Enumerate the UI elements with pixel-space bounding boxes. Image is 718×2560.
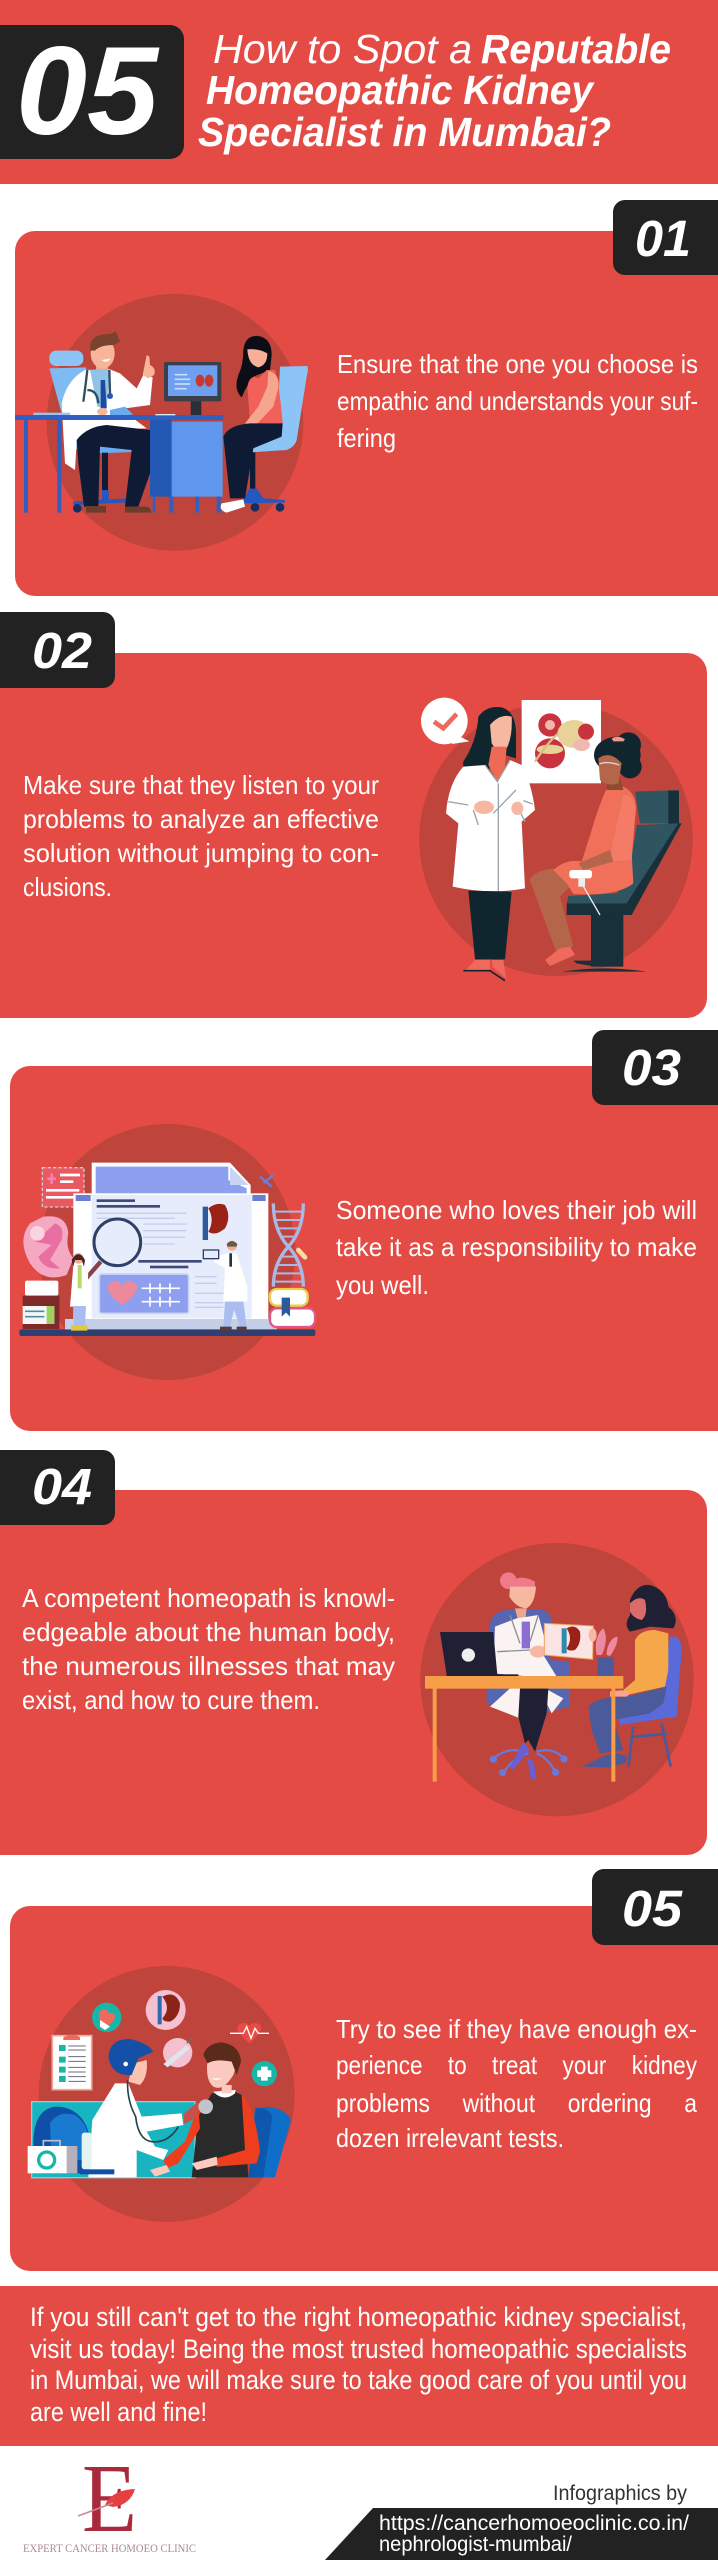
text: step 02: clusions. — [23, 872, 112, 902]
title — [198, 26, 671, 155]
text: step 04 — [22, 1583, 395, 1715]
closing call-to-action band — [0, 2286, 718, 2446]
panel: step 05 — [10, 1869, 718, 2271]
number tag 05 — [592, 1869, 718, 1945]
title: Reputable — [481, 26, 671, 72]
badge: big number 05: 05 — [16, 22, 160, 161]
text: step 04: A competent homeopath is knowl- — [22, 1583, 395, 1613]
text: step 04: edgeable about the human body, — [22, 1617, 395, 1647]
text: step 01: fering — [337, 423, 396, 453]
panel: step 01 — [15, 200, 718, 596]
header banner — [0, 0, 718, 184]
illustration: doctor explaining kidney chart to seated patient — [419, 698, 693, 981]
closing call-to-action band: are well and fine! — [30, 2397, 207, 2427]
number tag 05: 05 — [622, 1880, 683, 1937]
title: Specialist in Mumbai? — [198, 109, 611, 155]
number tag 03 — [592, 1030, 718, 1105]
text: step 05 — [336, 2014, 697, 2153]
text: step 05: Try to see if they have enough ex- — [336, 2014, 697, 2044]
panel: step 04 — [0, 1450, 707, 1855]
text: step 03: take it as a responsibility to make — [336, 1232, 697, 1262]
text: step 02: Make sure that they listen to your — [23, 770, 379, 800]
logo: Expert Cancer Homoeo Clinic: E — [82, 2445, 137, 2553]
text: step 05: dozen irrelevant tests. — [336, 2123, 564, 2153]
number tag 02 — [0, 612, 115, 688]
illustration: doctor and patient at desk — [15, 294, 308, 551]
url ribbon: https://cancerhomoeoclinic.co.in/ — [379, 2512, 689, 2535]
logo: Expert Cancer Homoeo Clinic: EXPERT CANCER HOMOEO CLINIC — [23, 2541, 196, 2555]
number tag 04: 04 — [32, 1458, 92, 1515]
text: step 03 — [336, 1195, 697, 1300]
title: How to Spot a — [213, 26, 472, 72]
panel: step 03 — [10, 1030, 718, 1431]
text: step 02: solution without jumping to con- — [23, 838, 379, 868]
text: step 03: you well. — [336, 1270, 429, 1300]
illustration: doctor at table showing kidney poster to patient — [420, 1543, 694, 1816]
text: step 04: the numerous illnesses that may — [22, 1651, 395, 1681]
text: step 04: exist, and how to cure them. — [22, 1685, 320, 1715]
panel: step 02 — [0, 612, 707, 1018]
text: step 03: Someone who loves their job will — [336, 1195, 697, 1225]
credit: Infographics by: Infographics by — [553, 2482, 687, 2505]
url ribbon — [325, 2508, 718, 2560]
illustration: doctor examining patient with stethoscope — [28, 1966, 295, 2222]
number tag 03: 03 — [622, 1039, 681, 1096]
number tag 04 — [0, 1450, 115, 1525]
number tag 02: 02 — [32, 622, 92, 679]
number tag 01: 01 — [635, 210, 691, 267]
logo: Expert Cancer Homoeo Clinic — [23, 2445, 196, 2555]
illustration: medical report with magnifier, kidney and DNA — [19, 1124, 315, 1380]
number tag 01 — [613, 200, 718, 275]
url ribbon: nephrologist-mumbai/ — [379, 2533, 572, 2556]
text: step 02: problems to analyze an effective — [23, 804, 379, 834]
text: step 01 — [337, 349, 698, 453]
title: Homeopathic Kidney — [206, 67, 595, 113]
text: step 02 — [23, 770, 379, 902]
